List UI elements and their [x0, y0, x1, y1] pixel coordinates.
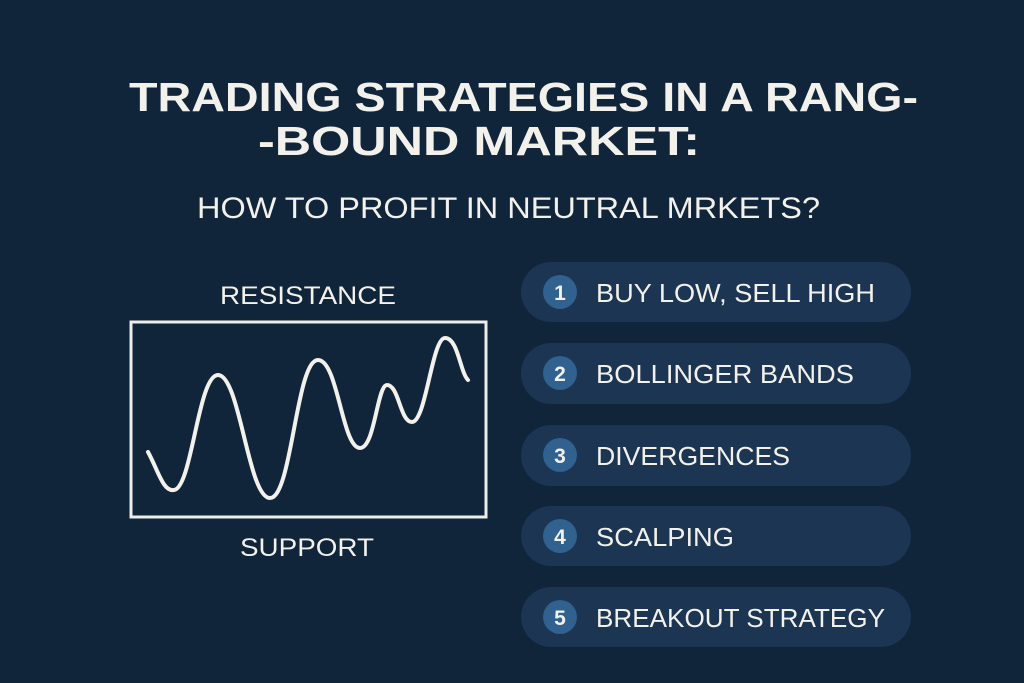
item 4: SCALPING — [596, 522, 734, 552]
item 4 — [521, 506, 911, 566]
label: support: SUPPORT — [240, 534, 374, 562]
item 5 — [521, 587, 911, 647]
item 1 — [521, 262, 911, 322]
item 1: BUY LOW, SELL HIGH — [596, 278, 875, 308]
item 1: 1 — [554, 282, 566, 305]
range box — [131, 322, 486, 517]
subtitle: HOW TO PROFIT IN NEUTRAL MRKETS? — [197, 192, 820, 225]
item 4: 4 — [554, 526, 566, 549]
item 2 — [521, 343, 911, 404]
title — [129, 74, 918, 164]
panel: range chart — [131, 282, 486, 562]
title: TRADING STRATEGIES IN A RANG- — [129, 74, 918, 120]
item 3: 3 — [554, 445, 566, 468]
item 3: DIVERGENCES — [596, 441, 790, 471]
item 3 — [521, 425, 911, 486]
price wave — [148, 338, 468, 498]
title: -BOUND MARKET: — [258, 118, 700, 164]
item 2: BOLLINGER BANDS — [596, 359, 854, 389]
item 2: 2 — [554, 363, 566, 386]
item 5: 5 — [554, 607, 566, 630]
list: strategies — [521, 262, 911, 647]
item 5: BREAKOUT STRATEGY — [596, 603, 885, 633]
label: resistance: RESISTANCE — [220, 282, 396, 310]
